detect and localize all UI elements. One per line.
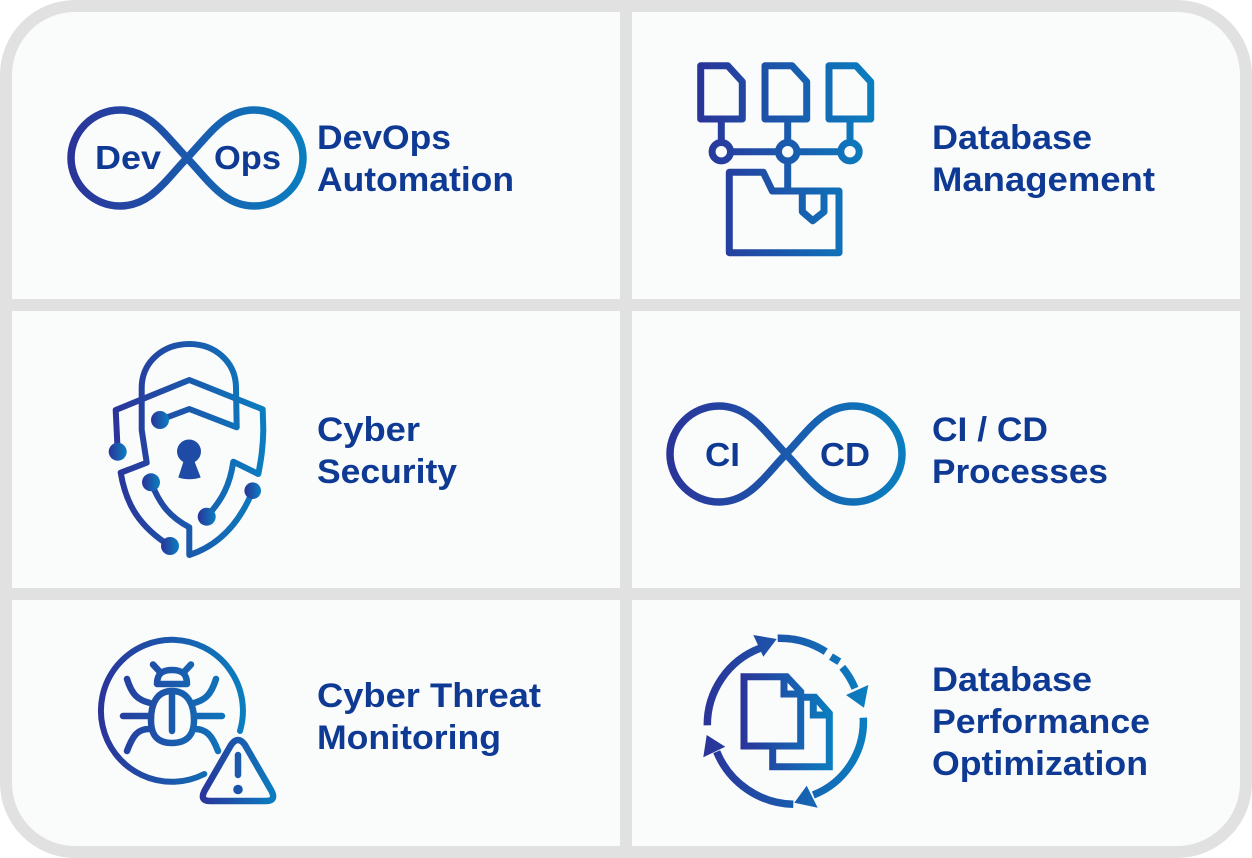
label: Cyber Threat Monitoring: Monitoring <box>317 719 501 757</box>
label: DevOps Automation <box>317 119 514 199</box>
label: Database Performance Optimization <box>932 661 1150 783</box>
label: Database Management: Database <box>932 119 1092 157</box>
icon: CI/CD infinity loop: CD <box>820 436 870 473</box>
label: Database Management <box>932 119 1155 199</box>
label: Database Performance Optimization: Optimization <box>932 745 1148 783</box>
label: Cyber Security: Security <box>317 453 457 491</box>
label: DevOps Automation: DevOps <box>317 119 451 157</box>
label: DevOps Automation: Automation <box>317 161 514 199</box>
label: Cyber Security <box>317 411 457 491</box>
icon: documents with circular arrows <box>703 635 868 808</box>
label: CI / CD Processes: Processes <box>932 453 1108 491</box>
label: Cyber Threat Monitoring <box>317 677 541 757</box>
label: Database Performance Optimization: Performance <box>932 703 1150 741</box>
label: CI / CD Processes: CI / CD <box>932 411 1048 449</box>
label: Cyber Threat Monitoring: Cyber Threat <box>317 677 541 715</box>
panel: Database Performance Optimization <box>703 635 1150 808</box>
label: Cyber Security: Cyber <box>317 411 420 449</box>
panel: DevOps Automation <box>71 110 514 206</box>
icon: CI/CD infinity loop <box>670 406 902 502</box>
label: Database Management: Management <box>932 161 1155 199</box>
panel: Cyber Security <box>109 344 457 555</box>
icon: DevOps infinity loop <box>71 110 303 206</box>
panel: CI / CD Processes <box>670 406 1108 502</box>
panel: Cyber Threat Monitoring <box>101 640 541 801</box>
icon: shield with padlock and circuit nodes <box>109 344 263 555</box>
label: CI / CD Processes <box>932 411 1108 491</box>
icon: DevOps infinity loop: Ops <box>214 139 281 176</box>
icon: DevOps infinity loop: Dev <box>95 139 162 176</box>
label: Database Performance Optimization: Database <box>932 661 1092 699</box>
panel: Database Management <box>701 66 1155 253</box>
icon: database files and folder <box>701 66 871 253</box>
icon: CI/CD infinity loop: CI <box>705 436 740 473</box>
icon: bug in circle with warning triangle <box>101 640 273 801</box>
